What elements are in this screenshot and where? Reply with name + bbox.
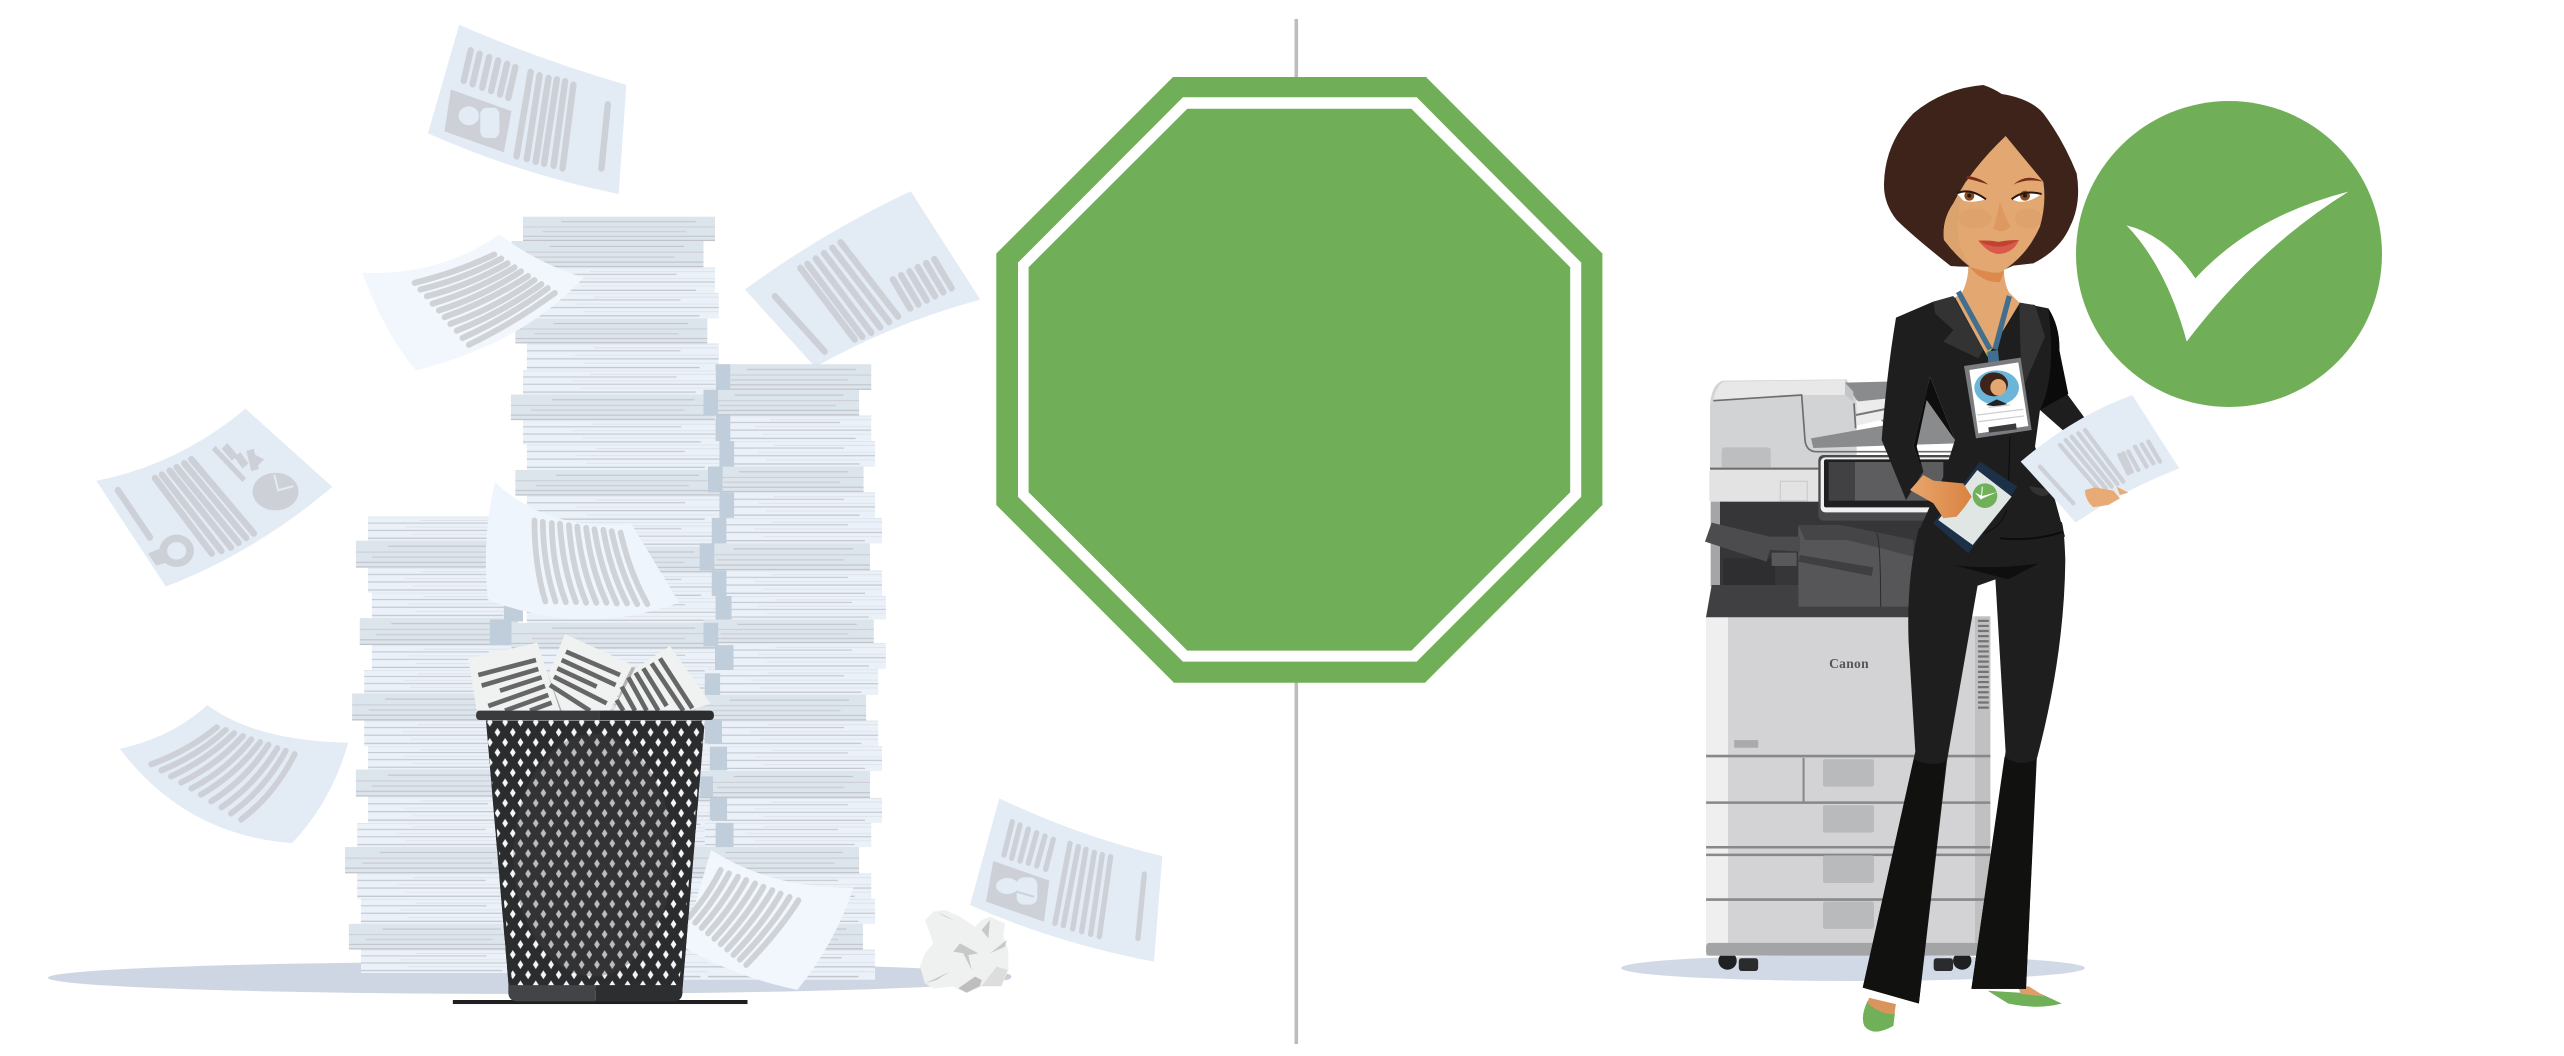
bin paper: left xyxy=(468,643,560,711)
face xyxy=(1944,136,2044,273)
printer shadow xyxy=(1621,955,2085,981)
paper stack: middle pile xyxy=(511,217,725,980)
hair xyxy=(1884,85,2078,270)
pocket xyxy=(2029,486,2052,496)
bin mesh body xyxy=(482,721,708,993)
falling sheet: centre over stack xyxy=(486,482,679,619)
hand holding phone xyxy=(1910,475,1972,518)
torso, jacket, badge, phone, document xyxy=(1882,290,2179,553)
floating sheet: top with photo block xyxy=(428,25,626,194)
chest skin xyxy=(1955,290,2020,358)
bin paper: centre xyxy=(548,634,633,711)
lips xyxy=(1978,240,2019,254)
stop sign octagon xyxy=(996,77,1602,683)
floating sheet and crumpled paper, lower right of left scene xyxy=(920,798,1162,993)
printer lower body xyxy=(1706,616,1990,971)
printer upper unit: scanner, touch panel, output trays xyxy=(1705,379,1957,617)
right scene: printer and employee xyxy=(1621,85,2382,1032)
floating sheet: lower right xyxy=(970,798,1162,962)
right lapel xyxy=(2019,303,2045,383)
bin paper: right xyxy=(613,646,711,711)
paper stack: left pile xyxy=(345,516,523,973)
check mark badge xyxy=(2076,101,2382,407)
printer brand name: Canon xyxy=(1829,656,1869,671)
trousers and shoes xyxy=(1863,522,2065,1032)
paper stack: right pile xyxy=(692,364,886,980)
centre divider line xyxy=(1294,19,1298,1044)
jacket xyxy=(1882,297,2085,542)
discarded papers poking out of bin xyxy=(468,634,714,720)
neck xyxy=(1950,267,2020,310)
floating sheet: upper right xyxy=(745,191,980,367)
document in hand xyxy=(2021,395,2179,523)
ID badge xyxy=(1964,358,2032,438)
green top xyxy=(1972,327,2020,365)
phone xyxy=(1933,462,2017,553)
employee figure xyxy=(1863,85,2179,1032)
floating sheet: lower left xyxy=(120,705,348,843)
crumpled paper ball xyxy=(920,910,1011,993)
bin rim xyxy=(476,711,714,720)
fallen sheet: behind bin lower right xyxy=(682,850,853,990)
left scene: paper overload xyxy=(48,25,1011,1004)
bin floor line xyxy=(453,1000,748,1004)
nose xyxy=(1993,202,2011,231)
lanyard xyxy=(1958,292,2009,349)
waste bin xyxy=(453,721,748,1004)
floor shadow under stacks xyxy=(48,962,1011,994)
floating sheet: left with chart and medal xyxy=(96,409,332,587)
eyes and brows xyxy=(1957,191,1986,202)
floating sheet: upper left curled xyxy=(362,234,584,370)
left lapel xyxy=(1933,296,1983,358)
head and hair xyxy=(1884,85,2078,310)
bin base xyxy=(508,985,596,1001)
